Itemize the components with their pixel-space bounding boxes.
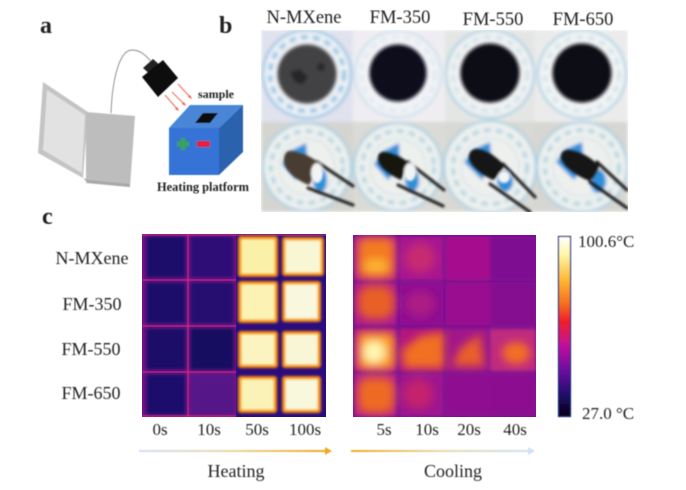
panel b: sample photographs: [261, 30, 628, 213]
column labels: heating: 100s: [289, 420, 321, 439]
sample discs: [278, 44, 612, 104]
text: heating platform: Heating platform: [157, 180, 250, 194]
headings: sample names: FM-550: [463, 10, 523, 30]
column labels: heating: 0s: [152, 420, 168, 439]
column labels: cooling: 40s: [503, 420, 527, 439]
row labels: FM-650: [61, 383, 121, 403]
seal rings, top row: [263, 30, 351, 118]
column labels: cooling: 20s: [457, 420, 481, 439]
chart: cooling thermal map: [353, 235, 536, 417]
blue seal marks: [282, 142, 606, 193]
row labels: FM-550: [61, 339, 121, 359]
headings: sample names: FM-350: [370, 8, 430, 28]
column labels: heating: 10s: [197, 420, 221, 439]
row labels: FM-350: [62, 294, 122, 314]
text: cooling: Cooling: [424, 461, 482, 481]
arrow: cooling: [351, 447, 535, 455]
column labels: heating: 50s: [245, 420, 269, 439]
row labels: N-MXene: [56, 248, 128, 268]
chart: heating thermal map: [142, 234, 326, 417]
wire: [111, 50, 152, 113]
label: panel a: a: [40, 13, 52, 39]
headings: sample names: N-MXene: [266, 8, 342, 28]
cooling hot spots: [358, 238, 530, 413]
heating grid lines: [142, 234, 326, 417]
text: scale minimum: 27.0 °C: [582, 404, 634, 423]
headings: sample names: [266, 8, 613, 30]
headings: sample names: FM-650: [553, 10, 613, 30]
samples held by tweezers: [284, 149, 627, 212]
color scale bar: [558, 236, 570, 416]
icon: laptop: [38, 82, 135, 187]
column labels: cooling: [376, 420, 527, 439]
column labels: heating: [152, 420, 321, 439]
row labels: [56, 248, 128, 403]
icon: heating platform box: [169, 105, 243, 175]
column labels: cooling: 10s: [415, 420, 439, 439]
column labels: cooling: 5s: [376, 420, 392, 439]
label: panel c: c: [42, 204, 53, 230]
seal rings, bottom row: [263, 121, 627, 213]
arrows: infrared beams: [165, 84, 192, 111]
panel a: heating setup diagram: [38, 50, 243, 187]
text: scale maximum: 100.6°C: [578, 232, 634, 251]
text: sample: sample: [198, 87, 235, 101]
arrow: heating: [139, 447, 332, 455]
text: heating: Heating: [208, 461, 264, 481]
label: panel b: b: [219, 13, 232, 39]
icon: infrared camera: [142, 59, 178, 97]
